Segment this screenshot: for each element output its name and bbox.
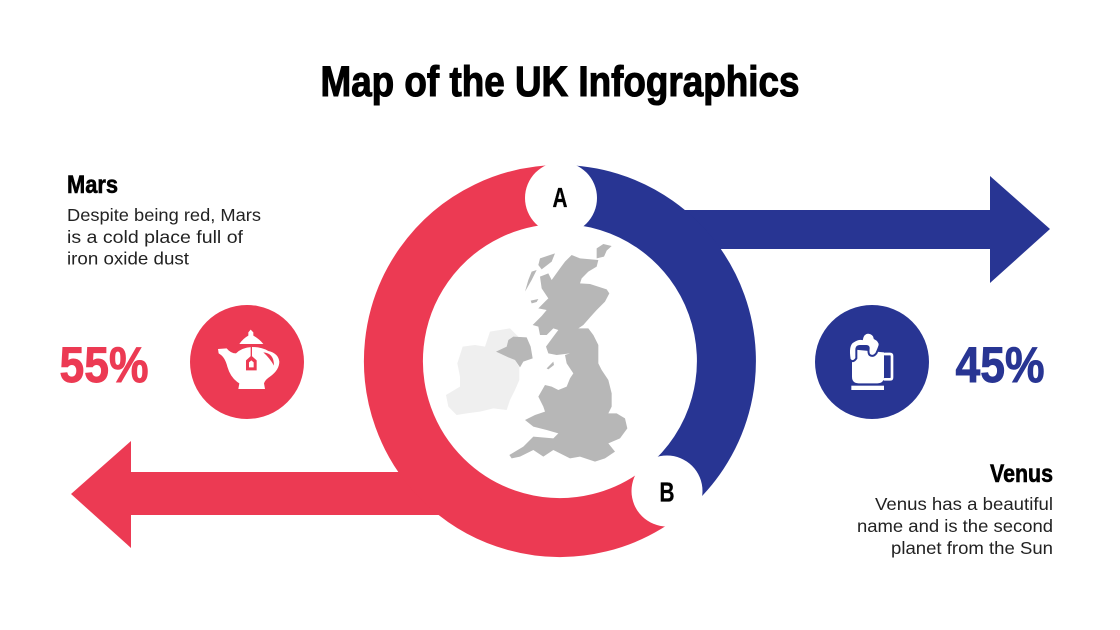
Great Britain	[509, 255, 627, 462]
blue ring segment	[560, 194, 726, 490]
title: Map of the UK Infographics	[320, 59, 800, 106]
marker A: A	[552, 182, 568, 213]
Venus description: Venus has a beautiful	[875, 494, 1053, 514]
Mars description: iron oxide dust	[67, 248, 189, 268]
marker A	[525, 162, 597, 234]
Venus description: planet from the Sun	[891, 538, 1053, 558]
icon: teapot	[190, 305, 304, 419]
Venus description	[857, 494, 1053, 558]
Venus description: name and is the second	[857, 516, 1053, 536]
Mars description: is a cold place full of	[67, 227, 243, 247]
marker B: B	[660, 476, 674, 508]
Venus percentage: 45%	[956, 337, 1044, 393]
blue arrow pointing right	[680, 176, 1050, 283]
red ring segment	[393, 194, 666, 527]
map of the UK and Ireland	[446, 244, 627, 462]
Scottish islands	[525, 244, 612, 369]
Venus heading: Venus	[990, 460, 1053, 488]
marker B	[632, 456, 702, 526]
Mars percentage: 55%	[60, 337, 148, 393]
Mars heading: Mars	[67, 171, 118, 199]
red arrow pointing left	[71, 441, 440, 548]
Northern Ireland	[496, 337, 533, 367]
Mars description	[67, 205, 261, 268]
Republic of Ireland	[446, 328, 519, 415]
Mars description: Despite being red, Mars	[67, 205, 261, 225]
icon: mug of beer	[815, 305, 929, 419]
